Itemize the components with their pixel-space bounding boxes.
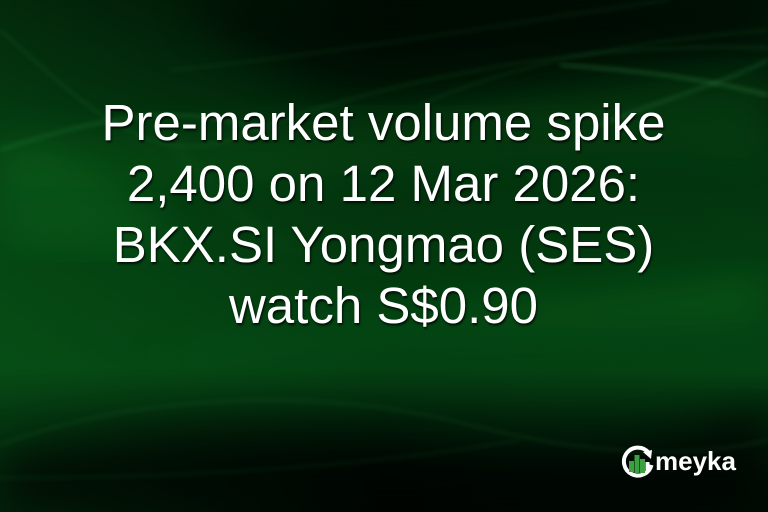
title: watch S$0.90 xyxy=(229,277,538,334)
title: BKX.SI Yongmao (SES) xyxy=(113,216,654,273)
title: 2,400 on 12 Mar 2026: xyxy=(127,155,640,212)
icon: ring with bars xyxy=(622,446,654,478)
title xyxy=(101,94,666,334)
logo: Meyka xyxy=(622,446,736,478)
title: Pre-market volume spike xyxy=(101,94,666,151)
wordmark: meyka xyxy=(655,446,736,476)
